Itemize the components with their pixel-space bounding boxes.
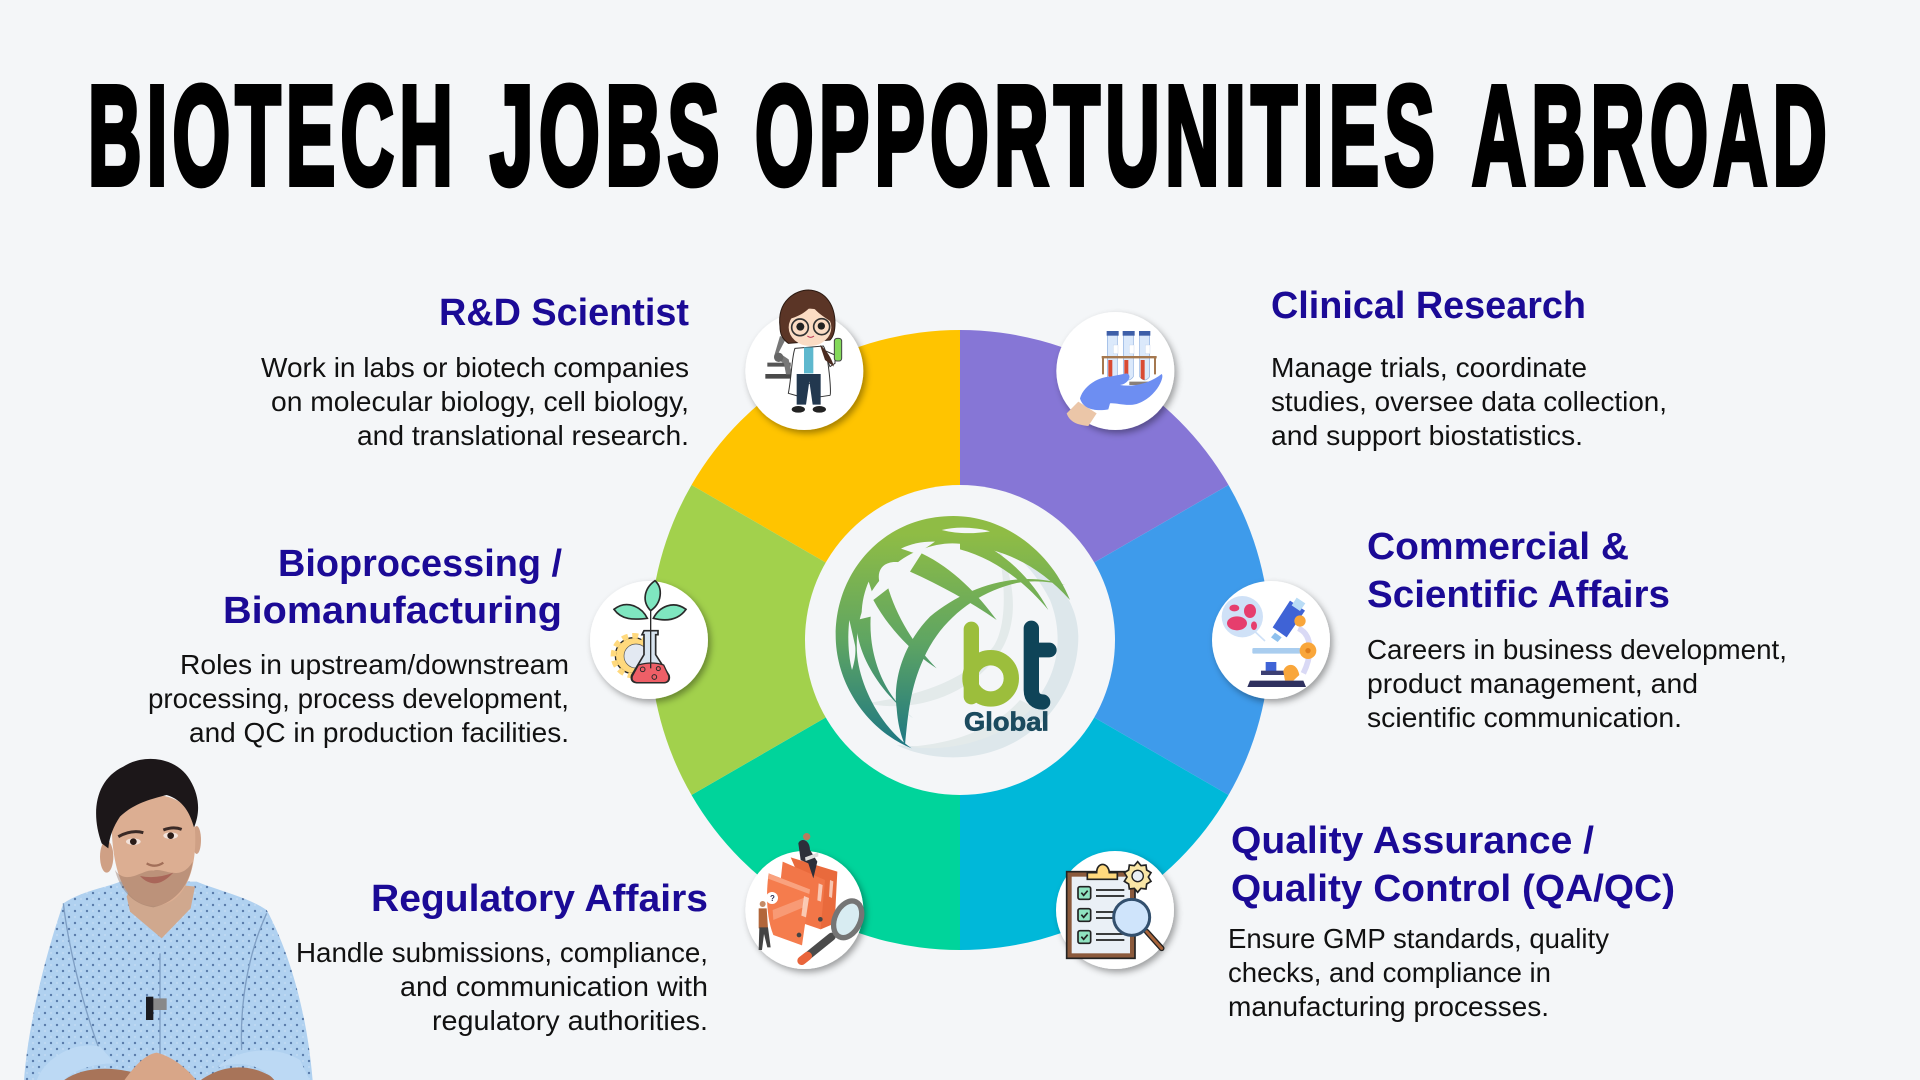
body text: Ensure GMP standards, quality xyxy=(1228,923,1609,954)
body text: regulatory authorities. xyxy=(432,1005,708,1036)
panel: Clinical Research xyxy=(1271,285,1667,451)
body text: processing, process development, xyxy=(148,683,569,714)
body text xyxy=(261,352,689,451)
body text: scientific communication. xyxy=(1367,702,1682,733)
icon: clipboard checklist xyxy=(1056,851,1174,969)
center hub xyxy=(805,485,1115,795)
body text: and QC in production facilities. xyxy=(189,717,569,748)
panel: R&D Scientist xyxy=(261,292,689,451)
segment: Commercial and Scientific Affairs xyxy=(960,485,1270,795)
body text xyxy=(148,649,569,748)
heading xyxy=(1367,526,1670,616)
heading: Clinical Research xyxy=(1271,285,1586,327)
heading: Commercial & xyxy=(1367,526,1629,568)
body text: on molecular biology, cell biology, xyxy=(271,386,689,417)
letters: bt xyxy=(970,628,1049,702)
body text: Handle submissions, compliance, xyxy=(296,937,708,968)
heading: Quality Control (QA/QC) xyxy=(1231,868,1675,910)
body text: and translational research. xyxy=(357,420,689,451)
title xyxy=(88,56,1832,214)
body text: manufacturing processes. xyxy=(1228,991,1549,1022)
segment: Quality Assurance and Control xyxy=(960,640,1228,950)
heading: Quality Assurance / xyxy=(1231,820,1594,862)
panel: Commercial and Scientific Affairs xyxy=(1367,526,1787,733)
heading: Biomanufacturing xyxy=(223,590,562,632)
body text: Roles in upstream/downstream xyxy=(180,649,569,680)
icon: test tubes in gloved hand xyxy=(1056,312,1174,430)
icon: binders and magnifier xyxy=(745,833,867,969)
body text: and communication with xyxy=(400,971,708,1002)
panel: Regulatory Affairs xyxy=(296,878,708,1036)
body text xyxy=(296,937,708,1036)
heading xyxy=(223,543,562,632)
body text: Manage trials, coordinate xyxy=(1271,352,1587,383)
portrait: presenter xyxy=(24,759,313,1080)
heading: Bioprocessing / xyxy=(278,543,562,585)
title: BIOTECH xyxy=(88,56,458,214)
heading: Regulatory Affairs xyxy=(371,878,708,920)
title: JOBS xyxy=(490,56,725,214)
globe net gaps xyxy=(848,528,990,670)
logo: bt Global globe xyxy=(836,516,1078,757)
segment: Bioprocessing xyxy=(650,485,960,795)
icon: plant in flask with gear xyxy=(590,581,708,699)
icon: microscope and cells xyxy=(1212,581,1330,699)
body text: Work in labs or biotech companies xyxy=(261,352,689,383)
heading: Scientific Affairs xyxy=(1367,574,1670,616)
panel: Bioprocessing and Biomanufacturing xyxy=(148,543,569,748)
body text xyxy=(1367,634,1787,733)
segment: Regulatory Affairs xyxy=(692,640,960,950)
panel: Quality Assurance and Quality Control xyxy=(1228,820,1675,1022)
body text: Careers in business development, xyxy=(1367,634,1787,665)
segment: R&D Scientist xyxy=(692,330,960,640)
body text: product management, and xyxy=(1367,668,1698,699)
wordmark: Global: Global xyxy=(964,707,1049,737)
icon: binders and magnifier: ? xyxy=(770,894,775,903)
donut chart xyxy=(650,330,1270,950)
body text xyxy=(1228,923,1609,1022)
heading xyxy=(1231,820,1675,910)
heading: R&D Scientist xyxy=(439,292,689,334)
icon: scientist xyxy=(745,290,863,430)
body text: and support biostatistics. xyxy=(1271,420,1583,451)
body text xyxy=(1271,352,1667,451)
segment: Clinical Research xyxy=(960,330,1228,640)
body text: studies, oversee data collection, xyxy=(1271,386,1667,417)
body text: checks, and compliance in xyxy=(1228,957,1551,988)
